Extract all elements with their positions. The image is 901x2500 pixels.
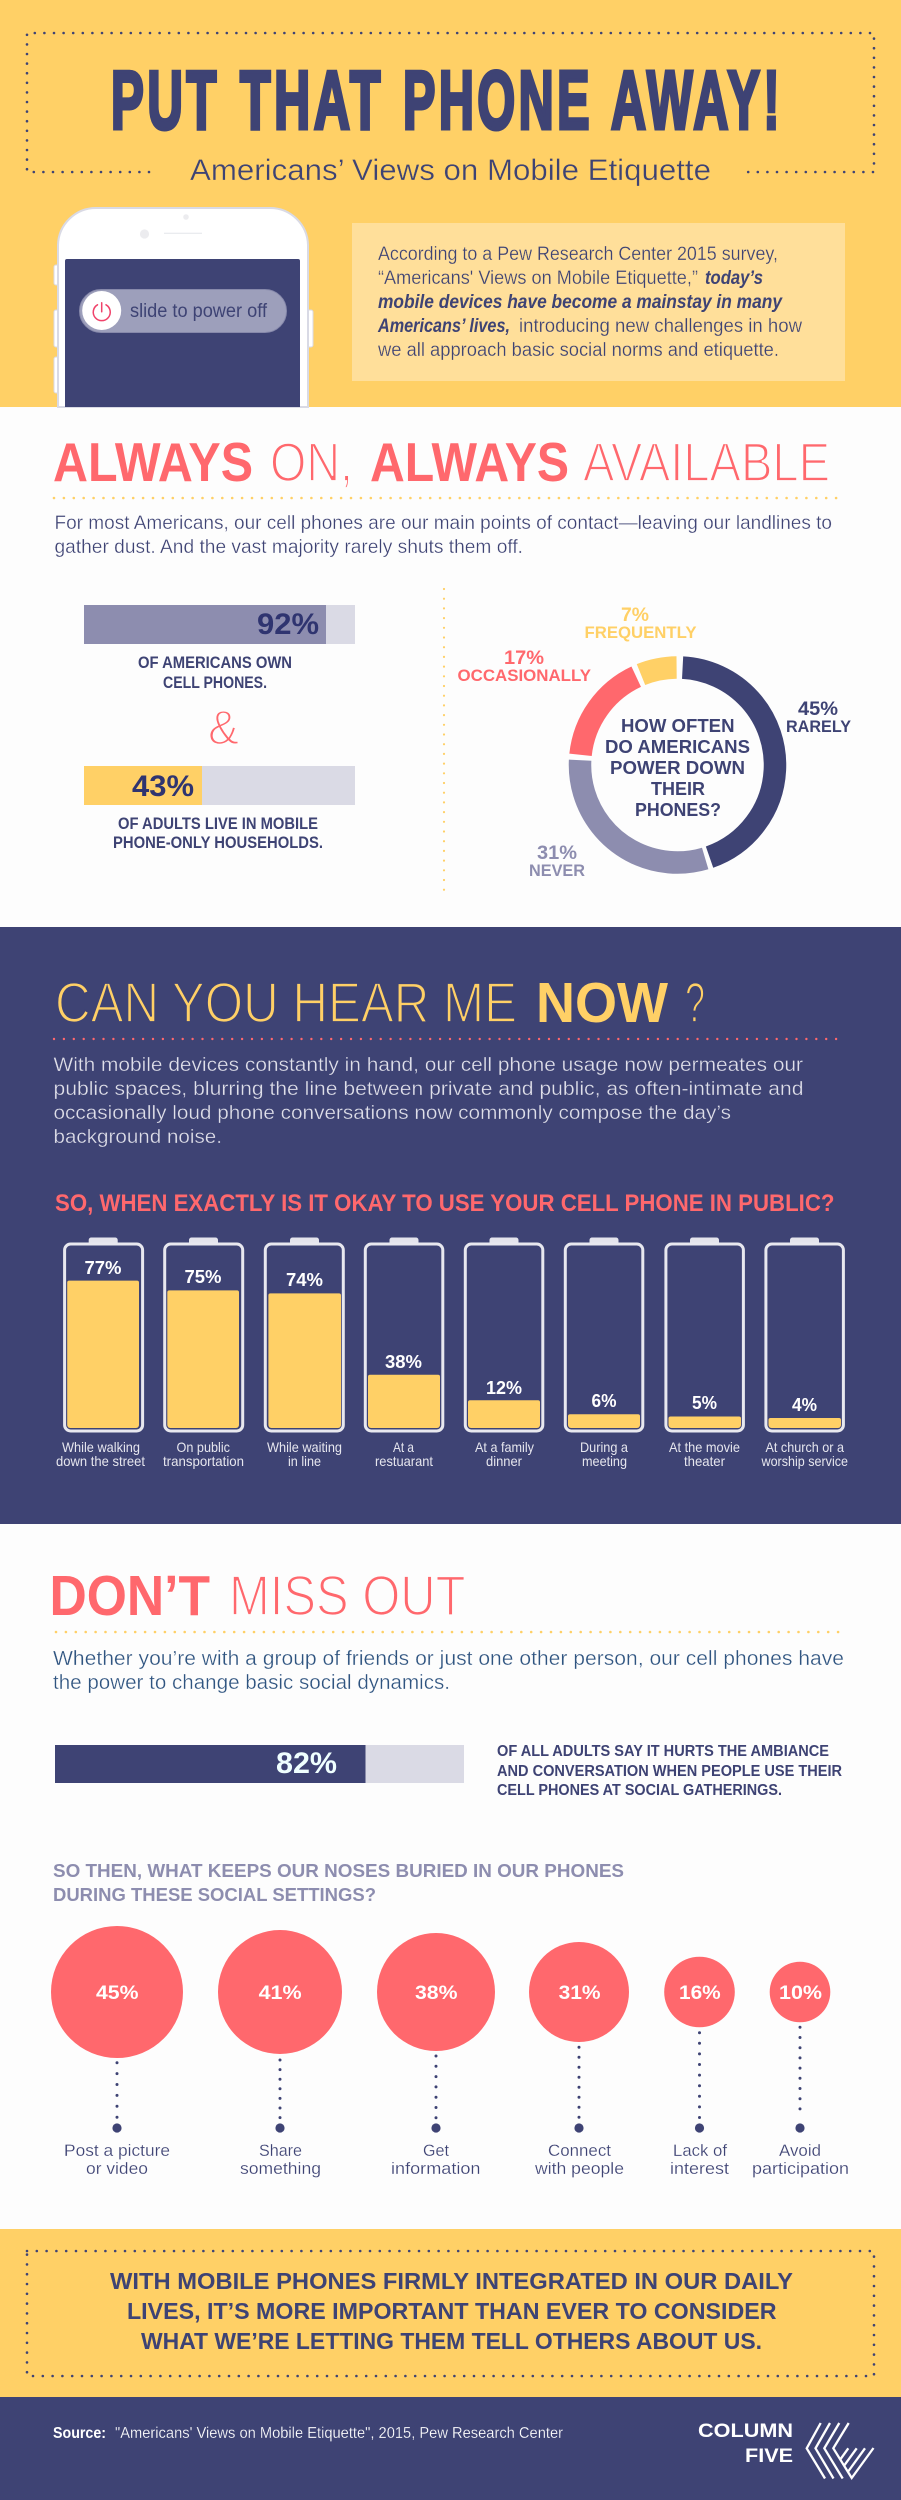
- bubble: 31% connect with people: [529, 1942, 629, 2178]
- bubble: 31% connect with people: 31%: [559, 1983, 601, 2004]
- bar: 82%: 82%: [276, 1747, 337, 1780]
- bubble: 45% post a picture or video: or video: [86, 2160, 148, 2178]
- battery: during a meeting 6%: [565, 1238, 643, 1469]
- bubble: 45% post a picture or video: [51, 1926, 183, 2178]
- panel: conclusion callout: LIVES, IT’S MORE IMPORTANT THAN EVER TO CONSIDER: [127, 2298, 777, 2324]
- bubble: 16% lack of interest: [664, 1957, 735, 2178]
- battery: during a meeting 6%: 6%: [592, 1391, 616, 1411]
- panel: conclusion callout: WITH MOBILE PHONES FIRMLY INTEGRATED IN OUR DAILY: [110, 2268, 793, 2294]
- heading: always on, always available: ALWAYS: [370, 431, 569, 493]
- donut chart: how often do Americans power down: PHONES?: [635, 800, 721, 820]
- donut label: occasionally: [458, 648, 592, 685]
- heading: can you hear me now: CAN YOU HEAR ME: [55, 971, 517, 1035]
- donut label: never: [529, 843, 585, 880]
- bar caption: [497, 1743, 842, 1799]
- battery chart: [56, 1238, 848, 1469]
- bubble: 10% avoid participation: Avoid: [779, 2142, 821, 2160]
- battery: during a meeting 6%: meeting: [582, 1453, 627, 1469]
- bar caption: AND CONVERSATION WHEN PEOPLE USE THEIR: [497, 1763, 842, 1780]
- heading: always on, always available: ON,: [270, 431, 353, 493]
- wordmark: column five: FIVE: [745, 2445, 793, 2467]
- heading: always on, always available: [53, 431, 830, 493]
- bubble: 16% lack of interest: Lack of: [673, 2142, 727, 2160]
- battery: at a family dinner 12%: 12%: [486, 1378, 522, 1398]
- intro text box: “Americans' Views on Mobile Etiquette,”: [378, 268, 698, 289]
- battery: at a family dinner 12%: dinner: [486, 1453, 522, 1469]
- donut label: rarely: RARELY: [786, 717, 852, 736]
- panel: conclusion callout: WHAT WE’RE LETTING THEM TELL OTHERS ABOUT US.: [141, 2328, 762, 2354]
- paragraph: Whether you’re with a group of friends or just one other person, our cell phones have: [53, 1648, 844, 1670]
- bubble: 41% share something: 41%: [259, 1983, 302, 2004]
- battery: at a family dinner 12%: [465, 1238, 543, 1469]
- heading: don't miss out: DON’T: [50, 1564, 210, 1628]
- paragraph: public spaces, blurring the line between private and public, as often-intimate and: [54, 1078, 804, 1100]
- wordmark: column five: [698, 2420, 793, 2467]
- panel: always on: [53, 431, 852, 895]
- battery: at a restaurant 38%: At a: [393, 1439, 414, 1455]
- bubble: 10% avoid participation: [752, 1962, 849, 2178]
- battery: at church or a worship service 4%: worship service: [761, 1453, 848, 1469]
- battery: while waiting in line 74%: 74%: [286, 1270, 323, 1290]
- donut label: occasionally: OCCASIONALLY: [458, 666, 592, 685]
- subheading: SO THEN, WHAT KEEPS OUR NOSES BURIED IN OUR PHONES: [53, 1861, 624, 1881]
- panel: don't miss out: [50, 1564, 849, 2178]
- subheading: DURING THESE SOCIAL SETTINGS?: [53, 1885, 376, 1905]
- battery: at the movie theater 5%: [666, 1238, 743, 1469]
- battery: at a restaurant 38%: 38%: [385, 1352, 422, 1372]
- bubble: 16% lack of interest: 16%: [679, 1983, 721, 2004]
- bar caption: OF ALL ADULTS SAY IT HURTS THE AMBIANCE: [497, 1743, 829, 1760]
- paragraph: the power to change basic social dynamics.: [53, 1672, 450, 1694]
- bar: 43% mobile-only households: [84, 766, 355, 852]
- donut chart: how often do Americans power down: POWER DOWN: [610, 758, 745, 778]
- subheading: [53, 1861, 624, 1905]
- donut label: never: 31%: [537, 843, 577, 864]
- bar: 92% own cell phones: OF AMERICANS OWN: [138, 653, 292, 672]
- paragraph: [54, 512, 832, 558]
- bar: 92% own cell phones: 92%: [257, 608, 319, 641]
- bubble chart: [51, 1926, 849, 2178]
- battery: while waiting in line 74%: in line: [288, 1453, 321, 1469]
- intro text box: According to a Pew Research Center 2015 survey,: [378, 244, 778, 265]
- paragraph: With mobile devices constantly in hand, our cell phone usage now permeates our: [54, 1054, 804, 1076]
- bubble: 10% avoid participation: participation: [752, 2160, 849, 2178]
- source line: "Americans' Views on Mobile Etiquette", 2015, Pew Research Center: [115, 2425, 564, 2442]
- bubble: 41% share something: Share: [259, 2142, 302, 2160]
- battery: while walking down the street 77%: While walking: [62, 1439, 140, 1455]
- paragraph: [54, 1054, 804, 1148]
- donut label: frequently: 7%: [621, 605, 649, 626]
- heading: can you hear me now: ?: [685, 971, 705, 1035]
- heading: don't miss out: [50, 1564, 466, 1628]
- title: AWAY!: [611, 54, 783, 147]
- title: PUT: [111, 54, 220, 147]
- panel: can you hear me now: [0, 927, 901, 1524]
- donut label: frequently: [584, 605, 697, 642]
- paragraph: For most Americans, our cell phones are our main points of contact—leaving our landlines to: [54, 512, 832, 534]
- donut chart: how often do Americans power down: [551, 638, 804, 892]
- bubble: 31% connect with people: Connect: [548, 2142, 611, 2160]
- donut chart: how often do Americans power down: HOW OFTEN: [621, 716, 734, 736]
- intro text box: today’s: [705, 268, 763, 289]
- intro text box: Americans’ lives,: [377, 316, 510, 337]
- donut label: rarely: 45%: [798, 699, 838, 720]
- bubble: 38% get information: Get: [423, 2142, 449, 2160]
- battery: at the movie theater 5%: theater: [684, 1453, 725, 1469]
- bubble: 10% avoid participation: 10%: [779, 1983, 822, 2004]
- heading: always on, always available: AVAILABLE: [583, 431, 830, 493]
- battery: on public transportation 75%: 75%: [184, 1267, 222, 1287]
- title: THAT: [240, 54, 384, 147]
- battery: during a meeting 6%: During a: [580, 1439, 628, 1455]
- donut label: never: NEVER: [529, 861, 585, 880]
- battery: at church or a worship service 4%: At church or a: [766, 1439, 844, 1455]
- intro text box: introducing new challenges in how: [519, 316, 802, 337]
- battery: while waiting in line 74%: [265, 1238, 343, 1469]
- bubble: 38% get information: 38%: [415, 1983, 458, 2004]
- paragraph: background noise.: [54, 1126, 222, 1148]
- battery: while walking down the street 77%: down the street: [56, 1453, 145, 1469]
- bubble: 45% post a picture or video: 45%: [96, 1983, 139, 2004]
- bubble: 31% connect with people: with people: [534, 2160, 624, 2178]
- bar: 92% own cell phones: [84, 605, 355, 692]
- battery: on public transportation 75%: On public: [176, 1439, 230, 1455]
- heading: can you hear me now: NOW: [536, 971, 668, 1035]
- bar: 43% mobile-only households: OF ADULTS LIVE IN MOBILE: [118, 814, 318, 833]
- panel: footer: [0, 2397, 901, 2500]
- intro text box: mobile devices have become a mainstay in many: [378, 292, 783, 313]
- heading: always on, always available: ALWAYS: [53, 431, 253, 493]
- intro text box: we all approach basic social norms and etiquette.: [377, 340, 779, 361]
- wordmark: column five: COLUMN: [698, 2420, 793, 2442]
- battery: at church or a worship service 4%: [761, 1238, 848, 1469]
- paragraph: gather dust. And the vast majority rarely shuts them off.: [54, 536, 523, 558]
- battery: on public transportation 75%: [163, 1238, 244, 1469]
- panel: header: [0, 0, 901, 407]
- title: PHONE: [403, 54, 593, 147]
- paragraph: occasionally loud phone conversations now commonly compose the day’s: [54, 1102, 731, 1124]
- bar: 43% mobile-only households: 43%: [132, 770, 194, 803]
- subheading: SO, WHEN EXACTLY IS IT OKAY TO USE YOUR CELL PHONE IN PUBLIC?: [55, 1190, 834, 1217]
- donut chart: how often do Americans power down: DO AMERICANS: [605, 737, 750, 757]
- bar: 92% own cell phones: CELL PHONES.: [163, 673, 267, 692]
- panel: conclusion callout: [0, 2229, 901, 2397]
- icon: phone with power-off slider: [54, 208, 313, 407]
- battery: at a restaurant 38%: restuarant: [375, 1453, 433, 1469]
- intro text box: [352, 223, 845, 381]
- battery: at a family dinner 12%: At a family: [475, 1439, 534, 1455]
- battery: at church or a worship service 4%: 4%: [792, 1395, 817, 1415]
- battery: at the movie theater 5%: 5%: [692, 1393, 717, 1413]
- donut label: rarely: [786, 699, 852, 736]
- battery: while walking down the street 77%: [56, 1238, 145, 1469]
- donut chart: how often do Americans power down: THEIR: [651, 779, 705, 799]
- battery: at a restaurant 38%: [365, 1238, 443, 1469]
- bubble: 38% get information: information: [391, 2160, 480, 2178]
- icon: phone with power-off slider: slide to power off: [130, 301, 268, 322]
- bubble: 16% lack of interest: interest: [670, 2160, 729, 2178]
- battery: on public transportation 75%: transportation: [163, 1453, 244, 1469]
- ampersand: &: [208, 702, 239, 755]
- title: [111, 54, 783, 147]
- paragraph: [53, 1648, 844, 1694]
- bar: 43% mobile-only households: PHONE-ONLY HOUSEHOLDS.: [113, 833, 323, 852]
- bar: 82%: [55, 1745, 464, 1783]
- source line: Source:: [53, 2425, 106, 2442]
- donut label: occasionally: 17%: [504, 648, 544, 669]
- bar caption: CELL PHONES AT SOCIAL GATHERINGS.: [497, 1782, 782, 1799]
- battery: while waiting in line 74%: While waiting: [267, 1439, 342, 1455]
- heading: don't miss out: MISS OUT: [229, 1564, 466, 1628]
- subtitle: Americans’ Views on Mobile Etiquette: [190, 154, 711, 187]
- icon: column five logo: [807, 2423, 874, 2478]
- battery: while walking down the street 77%: 77%: [84, 1258, 122, 1278]
- bubble: 41% share something: something: [240, 2160, 321, 2178]
- battery: at the movie theater 5%: At the movie: [669, 1439, 740, 1455]
- donut label: frequently: FREQUENTLY: [584, 623, 697, 642]
- bubble: 41% share something: [218, 1930, 342, 2178]
- bubble: 38% get information: [377, 1933, 495, 2178]
- bubble: 45% post a picture or video: Post a picture: [64, 2142, 170, 2160]
